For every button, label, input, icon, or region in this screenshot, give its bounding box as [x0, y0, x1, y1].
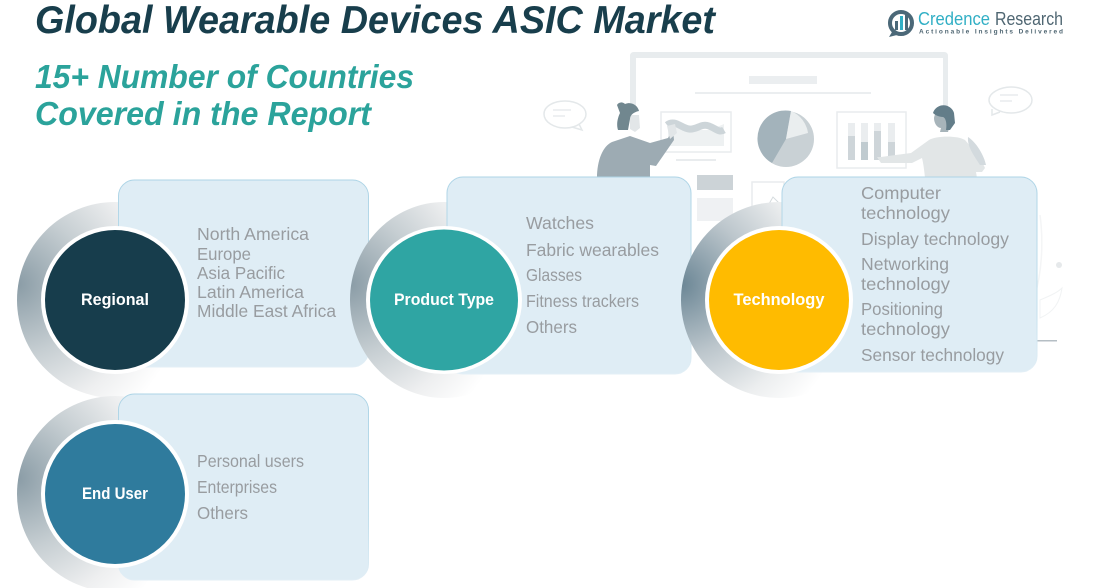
subtitle: Covered in the Report [35, 95, 373, 132]
logo: Credence Research [889, 9, 1063, 37]
list: technologies: technology [861, 203, 950, 223]
list: technologies: Display technology [861, 229, 1009, 249]
list: product types: Others [526, 317, 577, 337]
list: product types: Fabric wearables [526, 240, 659, 260]
panel: End User [17, 394, 368, 588]
circle: Regional: Regional [81, 291, 149, 309]
list: product types [526, 213, 659, 337]
logo icon [889, 12, 912, 37]
circle: End User [45, 424, 185, 564]
list: technologies: Computer [861, 183, 941, 203]
list: regions: Middle East Africa [197, 301, 336, 321]
pie chart [757, 110, 814, 167]
circle: Technology: Technology [734, 291, 825, 309]
panel: Technology [681, 177, 1037, 398]
list: regions: Asia Pacific [197, 263, 285, 283]
person right [877, 105, 986, 178]
circle: Regional [45, 230, 185, 370]
list: regions [197, 224, 336, 321]
list: technologies: technology [861, 274, 950, 294]
subtitle: 15+ Number of Countries [35, 58, 414, 95]
speech bubble right [989, 87, 1032, 115]
monitor frame [630, 52, 948, 110]
circle: Product Type: Product Type [394, 291, 494, 309]
circle: Product Type [370, 230, 518, 370]
speech bubble left [544, 101, 586, 130]
list: end users: Personal users [197, 451, 304, 471]
list: product types: Watches [526, 213, 594, 233]
list: technologies [861, 183, 1009, 365]
list: regions: Latin America [197, 282, 304, 302]
circle: End User: End User [82, 485, 149, 503]
circle: Technology [709, 230, 849, 370]
logo: Credence Research: Credence [918, 9, 990, 29]
list: product types: Glasses [526, 265, 582, 285]
bar chart card [837, 112, 906, 168]
list: regions: North America [197, 224, 309, 244]
subtitle [35, 58, 414, 132]
list: end users: Others [197, 503, 248, 523]
logo: Credence Research: Actionable Insights Delivered [919, 28, 1063, 36]
area chart card [661, 112, 731, 152]
faint right decoration [1035, 215, 1062, 318]
list: product types: Fitness trackers [526, 291, 639, 311]
title: Global Wearable Devices ASIC Market [35, 0, 717, 42]
list: end users [197, 451, 304, 523]
list: end users: Enterprises [197, 477, 277, 497]
list: technologies: technology [861, 319, 950, 339]
background illustration: presentation [544, 52, 1062, 342]
panel: Product Type [350, 177, 691, 398]
lower cards [697, 175, 733, 190]
list: technologies: Sensor technology [861, 345, 1004, 365]
person left [597, 102, 677, 178]
list: technologies: Networking [861, 254, 949, 274]
panel: Regional [17, 180, 368, 398]
list: technologies: Positioning [861, 299, 943, 319]
logo: Credence Research: Research [995, 9, 1063, 29]
list: regions: Europe [197, 244, 251, 264]
